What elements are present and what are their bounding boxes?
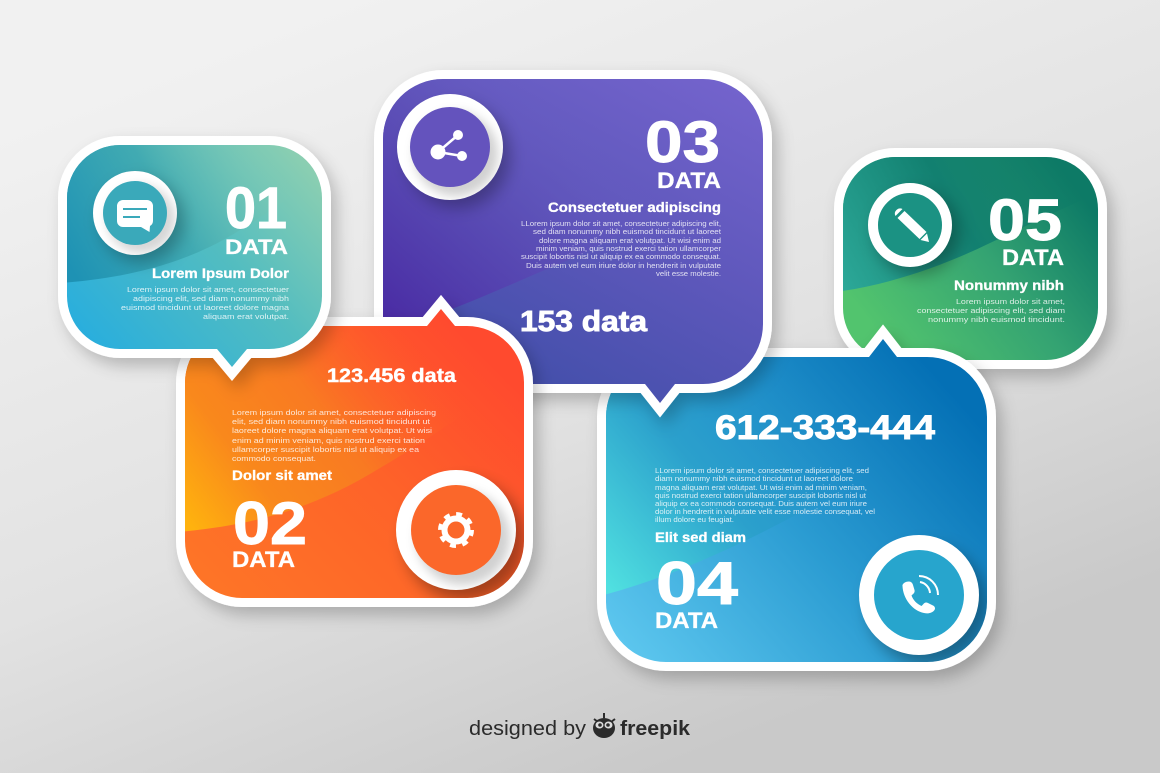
body text 02: commodo consequat. <box>232 454 316 463</box>
icon circle: chat <box>93 171 177 255</box>
number 05: 05 <box>988 188 1062 253</box>
label DATA: DATA <box>657 168 721 193</box>
footer: designed by freepik <box>469 713 691 740</box>
label DATA: DATA <box>225 236 288 259</box>
heading: Dolor sit amet: Dolor sit amet <box>232 468 333 483</box>
body text 01: euismod tincidunt ut laoreet dolore magna <box>121 303 290 312</box>
body text 04: illum dolore eu feugiat. <box>655 515 734 524</box>
body text 04 <box>655 466 875 524</box>
number 01: 01 <box>225 176 287 241</box>
body text 04: diam nonummy nibh euismod tincidunt ut laoreet dolore <box>655 474 853 483</box>
value: 612-333-444: 612-333-444 <box>715 409 935 447</box>
body text 04: magna aliquam erat volutpat. Ut wisi enim ad minim veniam, <box>655 483 867 492</box>
icon circle: pencil <box>873 188 947 262</box>
body text 05: nonummy nibh euismod tincidunt. <box>928 315 1065 324</box>
body text 03: velit esse molestie. <box>656 269 721 278</box>
body text 01: aliquam erat volutpat. <box>203 312 289 321</box>
body text 05: consectetuer adipiscing elit, sed diam <box>917 306 1065 315</box>
body text 03: dolore magna aliquam erat volutpat. Ut wisi enim ad <box>539 236 721 245</box>
panel: 02 orange card <box>178 300 530 601</box>
body text 02: ullamcorper suscipit lobortis nisl ut aliquip ex ea <box>232 445 420 454</box>
body text 04: dolor in hendrerit in vulputate velit esse molestie consequat, vel <box>655 507 875 516</box>
icon circle: share <box>397 94 503 200</box>
body text 05: Lorem ipsum dolor sit amet, <box>956 297 1065 306</box>
icon circle: gear <box>396 470 516 590</box>
brand name: freepik <box>620 718 691 740</box>
body text 01: adipiscing elit, sed diam nonummy nibh <box>133 294 289 303</box>
panel: 05 green card <box>835 150 1105 360</box>
body text 02: enim ad minim veniam, quis nostrud exerci tation <box>232 436 425 445</box>
body text 02: elit, sed diam nonummy nibh euismod tincidunt ut <box>232 417 430 426</box>
body text 01: Lorem ipsum dolor sit amet, consectetuer <box>127 285 290 294</box>
number 04: 04 <box>656 550 739 617</box>
panel: 01 teal card <box>60 135 330 370</box>
number 02: 02 <box>233 490 307 557</box>
body text 04: quis nostrud exerci tation ullamcorper suscipit lobortis nisl ut <box>655 491 866 500</box>
icon: chat bubble <box>117 200 153 232</box>
heading: Nonummy nibh: Nonummy nibh <box>954 278 1064 293</box>
number 03: 03 <box>645 110 720 175</box>
icon: pencil <box>895 208 929 242</box>
credit text: designed by <box>469 718 586 740</box>
label DATA: DATA <box>1002 245 1064 270</box>
body text 03 <box>521 219 722 278</box>
body text 01 <box>121 285 290 321</box>
label DATA: DATA <box>232 547 295 572</box>
body text 02 <box>232 408 436 463</box>
icon circle: phone <box>866 542 972 648</box>
value: 153 data: 153 data <box>520 306 648 338</box>
icon: gear <box>440 514 472 546</box>
body text 03: sed diam nonummy nibh euismod tincidunt ut laoreet <box>533 227 721 236</box>
icon: freepik mascot <box>593 713 615 738</box>
body text 02: laoreet dolore magna aliquam erat volutpat. Ut wisi <box>232 426 432 435</box>
icon: share <box>430 130 467 161</box>
body text 02: Lorem ipsum dolor sit amet, consectetuer adipiscing <box>232 408 436 417</box>
body text 03: LLorem ipsum dolor sit amet, consectetuer adipiscing elit, <box>521 219 721 228</box>
body text 03: Duis autem vel eum iriure dolor in hendrerit in vulputate <box>526 261 721 270</box>
body text 05 <box>917 297 1065 324</box>
heading: Consectetuer adipiscing: Consectetuer adipiscing <box>548 200 721 215</box>
heading: Elit sed diam: Elit sed diam <box>655 530 746 545</box>
label DATA: DATA <box>655 608 718 633</box>
body text 03: minim veniam, quis nostrud exerci tation ullamcorper <box>536 244 722 253</box>
body text 04: LLorem ipsum dolor sit amet, consectetuer adipiscing elit, sed <box>655 466 869 475</box>
panel: 03 purple card <box>375 70 770 409</box>
icon: phone <box>902 576 938 613</box>
heading: Lorem Ipsum Dolor: Lorem Ipsum Dolor <box>152 266 290 281</box>
panel: 04 blue card <box>600 335 995 666</box>
body text 04: aliquip ex ea commodo consequat. Duis autem vel eum iriure <box>655 499 867 508</box>
body text 03: suscipit lobortis nisl ut aliquip ex ea commodo consequat. <box>521 252 721 261</box>
value: 123.456 data: 123.456 data <box>327 365 456 387</box>
